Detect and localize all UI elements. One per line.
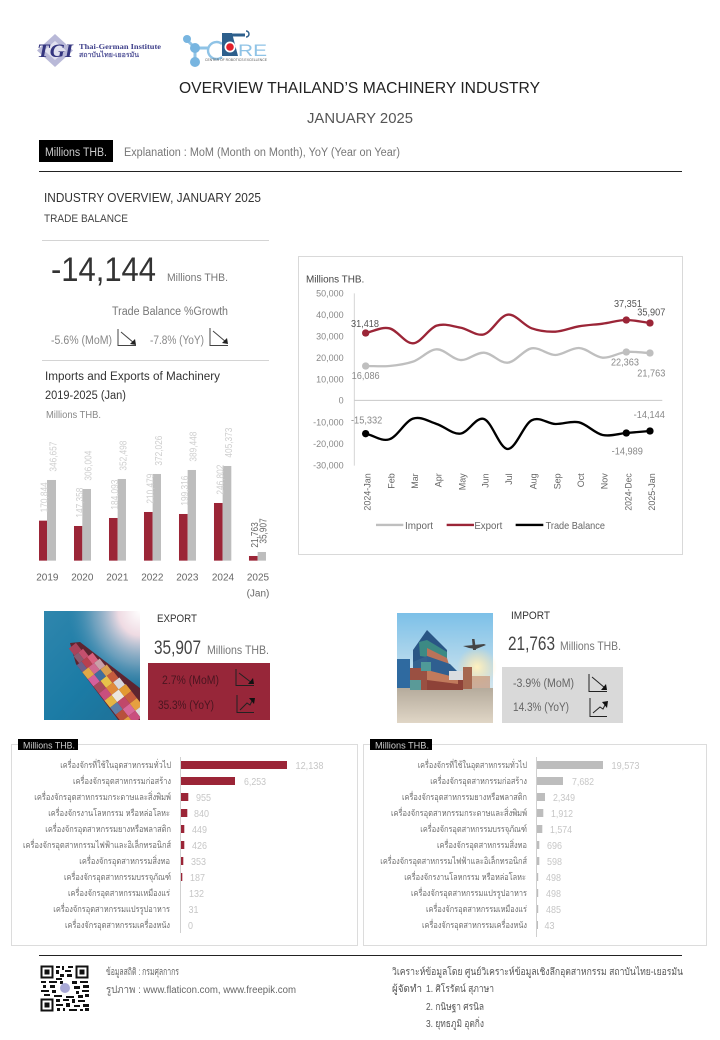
unit tag and explanation bbox=[39, 140, 400, 162]
bar chart: imports and exports 2019-2025: 2022 bbox=[141, 573, 164, 584]
labels: import machinery types: เครื่องจักรอุตสาหกรรมบรรจุภัณฑ์ bbox=[420, 822, 527, 835]
labels: export machinery types: เครื่องจักรอุตสาหกรรมยางหรือพลาสติก bbox=[45, 822, 171, 835]
bar chart: imports and exports 2019-2025: 21,763 bbox=[250, 522, 261, 548]
line: export: 31,418 bbox=[351, 319, 379, 330]
values: export: 426 bbox=[192, 840, 207, 852]
bar chart: imports and exports 2019-2025: 246,802 bbox=[215, 465, 226, 495]
x axis labels: Sep bbox=[552, 473, 562, 489]
icon: trend up bbox=[237, 695, 255, 712]
values: export: 31 bbox=[188, 904, 199, 916]
import figure: Millions THB. bbox=[560, 639, 621, 653]
legend: Import bbox=[405, 521, 433, 532]
values: export bbox=[188, 760, 324, 932]
bar chart: imports and exports 2019-2025: 35,907 bbox=[259, 518, 270, 544]
values: import: 498 bbox=[546, 888, 561, 900]
trade balance growth bbox=[51, 306, 228, 347]
line: import: 22,363 bbox=[611, 357, 639, 368]
logo: Thai-German Institute: สถาบันไทย-เยอรมัน bbox=[79, 50, 139, 59]
labels: export machinery types bbox=[23, 758, 171, 931]
logo: Thai-German Institute: TGI bbox=[37, 41, 74, 62]
values: export: 132 bbox=[189, 888, 204, 900]
trade balance figure bbox=[51, 251, 228, 289]
line: trade balance bbox=[351, 410, 666, 458]
bar chart: imports and exports 2019-2025 bbox=[36, 428, 270, 600]
unit tag and explanation: Millions THB. bbox=[45, 147, 107, 159]
line: export bbox=[351, 299, 665, 343]
labels: export machinery types: เครื่องจักรอุตสาหกรรมสิ่งทอ bbox=[79, 854, 170, 867]
logo: CORE: CENTER OF ROBOTICS EXCELLENCE bbox=[205, 58, 267, 62]
x axis labels: 2024-Dec bbox=[623, 473, 633, 511]
values: import: 43 bbox=[544, 920, 555, 932]
analysis credits: 2. กนิษฐา ศรนิล bbox=[426, 1002, 484, 1013]
labels: export machinery types: เครื่องจักรอุตสาหกรรมไฟฟ้าและอิเล็กทรอนิกส์ bbox=[23, 838, 171, 851]
values: import: 1,574 bbox=[550, 824, 572, 836]
bar chart: imports and exports 2019-2025: 306,004 bbox=[84, 450, 95, 481]
icon: trend down bbox=[236, 669, 254, 686]
x axis labels: Jul bbox=[504, 473, 514, 485]
y axis: 20,000 bbox=[316, 353, 344, 363]
export figure: 35,907 bbox=[154, 638, 201, 659]
analysis credits bbox=[392, 965, 683, 1030]
heading: trade balance: TRADE BALANCE bbox=[44, 213, 128, 225]
line: export: 37,351 bbox=[614, 299, 642, 310]
icon: trend up bbox=[590, 698, 608, 716]
values: import: 696 bbox=[547, 840, 562, 852]
line: import: 16,086 bbox=[352, 371, 380, 382]
values: import: 598 bbox=[547, 856, 562, 868]
bar chart: imports and exports 2019-2025: 2025 bbox=[247, 573, 270, 584]
tag: unit: Millions THB. bbox=[375, 740, 429, 752]
labels: import machinery types: เครื่องจักรอุตสาหกรรมเครื่องหนัง bbox=[422, 918, 527, 931]
panel: import growth: -3.9% (MoM) bbox=[513, 678, 574, 690]
analysis credits: วิเคราะห์ข้อมูลโดย ศูนย์วิเคราะห์ข้อมูลเชิงลึกอุตสาหกรรม สถาบันไทย-เยอรมัน bbox=[392, 965, 683, 978]
x axis labels: Apr bbox=[434, 473, 444, 487]
bar chart: imports and exports 2019-2025: 2020 bbox=[71, 573, 94, 584]
logo: CORE bbox=[183, 31, 267, 67]
panel: export growth: 35.3% (YoY) bbox=[158, 700, 214, 712]
panel: monthly line chart bbox=[298, 256, 682, 554]
panel: import growth: 14.3% (YoY) bbox=[513, 702, 569, 714]
import figure bbox=[508, 634, 621, 655]
legend bbox=[376, 521, 605, 532]
values: export: 353 bbox=[191, 856, 206, 868]
x axis labels bbox=[362, 473, 657, 511]
values: import: 498 bbox=[546, 872, 561, 884]
values: import bbox=[544, 760, 640, 932]
heading: imports and exports bbox=[45, 371, 220, 421]
legend: Export bbox=[474, 521, 503, 532]
bars: import bbox=[537, 761, 603, 929]
x axis labels: 2025-Jan bbox=[647, 473, 657, 511]
panel: export growth: 2.7% (MoM) bbox=[162, 675, 219, 687]
labels: export machinery types: เครื่องจักรที่ใช้ในอุตสาหกรรมทั่วไป bbox=[60, 758, 171, 771]
x axis labels: Aug bbox=[529, 473, 539, 489]
x axis labels: Oct bbox=[576, 473, 586, 487]
logo: CORE: RE bbox=[238, 41, 267, 60]
bar chart: imports and exports 2019-2025: 346,657 bbox=[49, 442, 60, 472]
y axis bbox=[313, 288, 344, 471]
panel: export growth bbox=[148, 663, 270, 720]
analysis credits: ผู้จัดทำ bbox=[392, 983, 422, 995]
labels: import machinery types bbox=[380, 758, 527, 931]
export figure bbox=[154, 638, 269, 659]
values: import: 19,573 bbox=[612, 760, 640, 772]
x axis labels: Mar bbox=[410, 473, 420, 489]
labels: import machinery types: เครื่องจักรอุตสาหกรรมไฟฟ้าและอิเล็กทรอนิกส์ bbox=[380, 854, 527, 867]
x axis labels: Jun bbox=[480, 473, 490, 488]
import figure: 21,763 bbox=[508, 634, 555, 655]
icon: trend down bbox=[118, 329, 136, 346]
bar chart: imports and exports 2019-2025: 2021 bbox=[106, 573, 129, 584]
values: export: 840 bbox=[194, 808, 209, 820]
heading: import: IMPORT bbox=[511, 610, 550, 622]
values: import: 1,912 bbox=[551, 808, 573, 820]
bar chart: imports and exports 2019-2025: 372,026 bbox=[154, 436, 165, 466]
legend: Trade Balance bbox=[546, 521, 605, 532]
labels: import machinery types: เครื่องจักรอุตสาหกรรมยางหรือพลาสติก bbox=[402, 790, 527, 803]
labels: export machinery types: เครื่องจักรอุตสาหกรรมเครื่องหนัง bbox=[65, 918, 170, 931]
y axis: -10,000 bbox=[313, 417, 344, 427]
trade balance figure: -14,144 bbox=[51, 251, 156, 289]
values: import: 2,349 bbox=[553, 792, 575, 804]
values: export: 449 bbox=[192, 824, 207, 836]
values: export: 6,253 bbox=[244, 776, 266, 788]
icon: trend down bbox=[589, 674, 607, 692]
source note bbox=[106, 966, 296, 996]
title: OVERVIEW THAILAND’S MACHINERY INDUSTRY bbox=[179, 80, 540, 97]
values: export: 187 bbox=[190, 872, 205, 884]
heading: imports and exports: Millions THB. bbox=[46, 410, 101, 421]
icon: airplane bbox=[463, 639, 486, 650]
source note: ข้อมูลสถิติ : กรมศุลกากร bbox=[106, 966, 179, 978]
source note: รูปภาพ : www.flaticon.com, www.freepik.com bbox=[106, 985, 296, 996]
panel: export by machinery type bbox=[12, 739, 358, 946]
values: export: 12,138 bbox=[296, 760, 324, 772]
line: export: 35,907 bbox=[637, 308, 665, 319]
icon: trend down bbox=[210, 328, 228, 346]
bar chart: imports and exports 2019-2025: 2024 bbox=[212, 573, 235, 584]
logo: Thai-German Institute: Thai-German Institute bbox=[79, 42, 162, 51]
y axis: 50,000 bbox=[316, 288, 344, 298]
bar chart: imports and exports 2019-2025: 199,316 bbox=[180, 476, 191, 506]
labels: import machinery types: เครื่องจักรอุตสาหกรรมสิ่งทอ bbox=[437, 838, 527, 851]
values: import: 485 bbox=[546, 904, 561, 916]
labels: export machinery types: เครื่องจักรอุตสาหกรรมก่อสร้าง bbox=[73, 774, 171, 787]
bar chart: imports and exports 2019-2025: 184,093 bbox=[110, 480, 121, 510]
bar chart: imports and exports 2019-2025: 2023 bbox=[176, 573, 199, 584]
labels: import machinery types: เครื่องจักรอุตสาหกรรมก่อสร้าง bbox=[430, 774, 527, 787]
line: import: 21,763 bbox=[637, 369, 665, 380]
bar chart: imports and exports 2019-2025: (Jan) bbox=[247, 589, 269, 600]
bar chart: imports and exports 2019-2025: 352,498 bbox=[119, 441, 130, 471]
bar chart: imports and exports 2019-2025: 2019 bbox=[36, 573, 59, 584]
labels: export machinery types: เครื่องจักรอุตสาหกรรมแปรรูปอาหาร bbox=[53, 902, 170, 915]
bar chart: imports and exports 2019-2025: 147,358 bbox=[75, 488, 86, 518]
x axis labels: Nov bbox=[600, 473, 610, 489]
panel: import by machinery type bbox=[364, 739, 706, 946]
y axis: 40,000 bbox=[316, 310, 344, 320]
image: container ship bbox=[44, 611, 140, 720]
analysis credits: 1. ศิโรรัตน์ สุภาษา bbox=[426, 982, 494, 995]
values: export: 955 bbox=[196, 792, 211, 804]
y axis: -30,000 bbox=[313, 461, 344, 471]
tag: unit: Millions THB. bbox=[23, 740, 75, 752]
subtitle: date: JANUARY 2025 bbox=[307, 111, 413, 127]
bar chart: imports and exports 2019-2025: 170,844 bbox=[40, 482, 51, 512]
heading: imports and exports: 2019-2025 (Jan) bbox=[45, 390, 126, 402]
y axis: 30,000 bbox=[316, 332, 344, 342]
values: export: 0 bbox=[188, 920, 193, 932]
line: trade balance: -14,144 bbox=[634, 410, 666, 421]
unit tag and explanation: Explanation : MoM (Month on Month), YoY (Year on Year) bbox=[124, 147, 400, 159]
line: trade balance: -14,989 bbox=[612, 447, 643, 458]
bar chart: imports and exports 2019-2025: 405,373 bbox=[224, 428, 235, 458]
heading: export: EXPORT bbox=[157, 613, 197, 625]
y axis: -20,000 bbox=[313, 439, 344, 449]
icon: QR code bbox=[41, 966, 89, 1011]
y axis: 0 bbox=[339, 396, 344, 406]
x axis labels: May bbox=[457, 473, 467, 490]
line: import bbox=[352, 348, 665, 382]
labels: export machinery types: เครื่องจักรอุตสาหกรรมกระดาษและสิ่งพิมพ์ bbox=[34, 790, 171, 803]
labels: import machinery types: เครื่องจักรอุตสาหกรรมกระดาษและสิ่งพิมพ์ bbox=[391, 806, 527, 819]
labels: export machinery types: เครื่องจักรอุตสาหกรรมเหมืองแร่ bbox=[68, 886, 170, 899]
analysis credits: 3. ยุทธภูมิ อุตกิ่ง bbox=[426, 1016, 484, 1030]
labels: export machinery types: เครื่องจักรอุตสาหกรรมบรรจุภัณฑ์ bbox=[64, 870, 171, 883]
values: import: 7,682 bbox=[572, 776, 594, 788]
bar chart: imports and exports 2019-2025: 210,479 bbox=[145, 474, 156, 504]
heading: industry overview: INDUSTRY OVERVIEW, JANUARY 2025 bbox=[44, 191, 261, 205]
x axis labels: Feb bbox=[386, 473, 396, 489]
trade balance figure: Millions THB. bbox=[167, 272, 228, 284]
y axis: 10,000 bbox=[316, 375, 344, 385]
panel: monthly line chart: Millions THB. bbox=[306, 275, 364, 286]
labels: import machinery types: เครื่องจักรที่ใช้ในอุตสาหกรรมทั่วไป bbox=[418, 758, 527, 771]
line: trade balance: -15,332 bbox=[351, 416, 382, 427]
labels: import machinery types: เครื่องจักรอุตสาหกรรมเหมืองแร่ bbox=[426, 902, 527, 915]
labels: export machinery types: เครื่องจักรงานโลหกรรม หรือหล่อโลหะ bbox=[48, 806, 170, 818]
bar chart: imports and exports 2019-2025: 389,448 bbox=[189, 432, 200, 462]
labels: import machinery types: เครื่องจักรอุตสาหกรรมแปรรูปอาหาร bbox=[411, 886, 527, 899]
panel: import growth bbox=[502, 667, 623, 723]
trade balance growth: Trade Balance %Growth bbox=[112, 306, 228, 318]
logo: Thai-German Institute bbox=[37, 34, 162, 67]
trade balance growth: -7.8% (YoY) bbox=[150, 335, 204, 347]
x axis labels: 2024-Jan bbox=[362, 473, 372, 511]
heading: imports and exports: Imports and Exports of Machinery bbox=[45, 371, 220, 383]
export figure: Millions THB. bbox=[207, 643, 269, 657]
labels: import machinery types: เครื่องจักรงานโลหกรรม หรือหล่อโลหะ bbox=[404, 870, 526, 882]
trade balance growth: -5.6% (MoM) bbox=[51, 335, 112, 347]
bars: export bbox=[181, 761, 287, 881]
image: containers and airplane bbox=[397, 613, 497, 723]
